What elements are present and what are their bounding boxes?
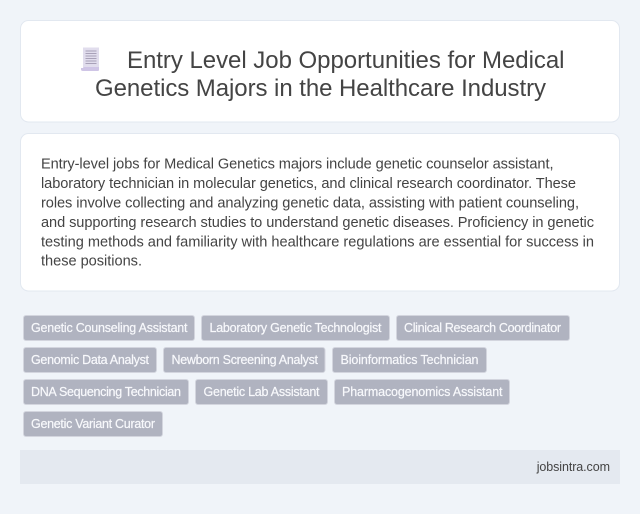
tag: Genetic Counseling Assistant [24,316,194,340]
description text: and supporting research studies to understand genetic diseases. Proficiency in genetic [41,215,594,231]
tag: Genomic Data Analyst [24,348,156,372]
tag: Laboratory Genetic Technologist: Laboratory Genetic Technologist [210,321,382,335]
tag: Genetic Lab Assistant: Genetic Lab Assistant [204,385,320,399]
tag: Clinical Research Coordinator: Clinical Research Coordinator [404,321,561,335]
tag: Bioinformatics Technician [332,348,486,372]
tag: Genetic Lab Assistant [196,380,328,404]
panel: description [20,134,620,291]
description text: roles involve collecting and analyzing genetic data, assisting with patient counseling, [41,196,579,212]
tag: Clinical Research Coordinator [396,316,570,340]
tag: Genetic Variant Curator: Genetic Variant Curator [31,417,155,431]
description text: these positions. [41,254,142,270]
panel: title card [20,20,620,122]
job tags [24,316,570,436]
description text: testing methods and familiarity with healthcare regulations are essential for success in [41,234,594,250]
tag: DNA Sequencing Technician: DNA Sequencing Technician [31,385,181,399]
title: Genetics Majors in the Healthcare Industry [95,75,546,102]
description text [41,156,594,270]
footer source text: jobsintra.com [536,460,610,474]
tag: Genetic Variant Curator [24,412,162,436]
tag: DNA Sequencing Technician [24,380,188,404]
tag: Laboratory Genetic Technologist [202,316,390,340]
tag: Genomic Data Analyst: Genomic Data Analyst [31,353,150,367]
tag: Newborn Screening Analyst: Newborn Screening Analyst [172,353,319,367]
tag: Newborn Screening Analyst [164,348,325,372]
tag: Bioinformatics Technician: Bioinformatics Technician [340,353,479,367]
title: Entry Level Job Opportunities for Medical [127,47,564,74]
description text: laboratory technician in molecular genetics, and clinical research coordinator. These [41,176,576,192]
tag: Genetic Counseling Assistant: Genetic Counseling Assistant [31,321,188,335]
tag: Pharmacogenomics Assistant: Pharmacogenomics Assistant [342,385,503,399]
icon: document scroll [81,48,99,71]
footer bar [20,450,620,484]
tag: Pharmacogenomics Assistant [334,380,510,404]
description text: Entry-level jobs for Medical Genetics majors include genetic counselor assistant, [41,156,554,172]
title [95,47,564,102]
